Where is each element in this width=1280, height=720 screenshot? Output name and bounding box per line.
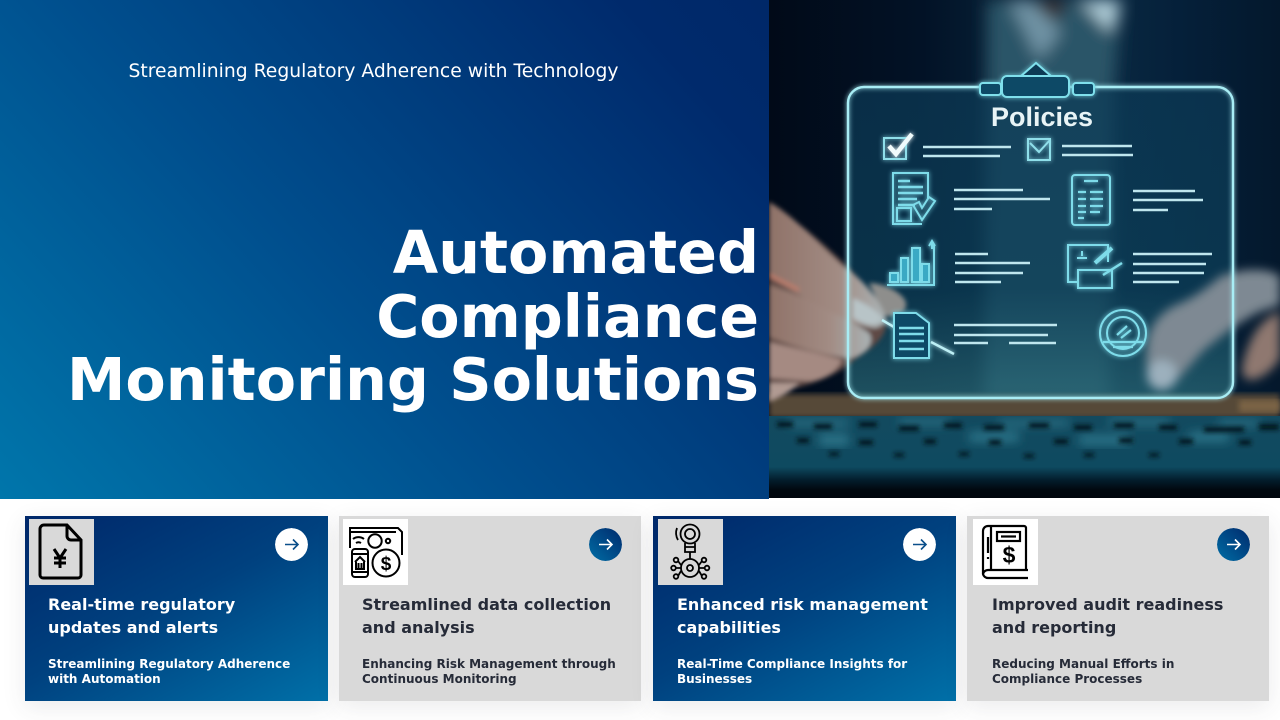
card description: Streamlining Regulatory Adherence bbox=[48, 657, 290, 671]
panel: card 2 data collection bbox=[339, 516, 641, 701]
card description bbox=[992, 657, 1174, 686]
panel: card 4 audit readiness bbox=[967, 516, 1269, 701]
card heading bbox=[677, 595, 928, 637]
card heading: and reporting bbox=[992, 618, 1116, 637]
left hand bbox=[769, 202, 906, 402]
blurred keyboard bbox=[769, 416, 1280, 498]
title: Monitoring Solutions bbox=[67, 346, 759, 414]
card heading: Improved audit readiness bbox=[992, 595, 1223, 614]
card heading: Real-time regulatory bbox=[48, 595, 235, 614]
card description: Real-Time Compliance Insights for bbox=[677, 657, 907, 671]
panel: hero gradient banner bbox=[0, 0, 769, 499]
icon: money and phone bbox=[343, 519, 408, 585]
heading: Policies: Policies bbox=[991, 102, 1093, 132]
card heading: Enhanced risk management bbox=[677, 595, 928, 614]
icon: arrow button bbox=[275, 528, 308, 561]
card description bbox=[362, 657, 616, 686]
clipboard panel fill bbox=[848, 87, 1233, 398]
policies clipboard frame bbox=[848, 63, 1233, 398]
icon: ledger book with dollar bbox=[973, 519, 1038, 585]
document and chart icons bbox=[882, 173, 1146, 358]
card description bbox=[48, 657, 290, 686]
title bbox=[67, 219, 759, 414]
card description: Businesses bbox=[677, 672, 752, 686]
card heading bbox=[48, 595, 235, 637]
panel: card 3 risk management bbox=[653, 516, 956, 701]
card description: Continuous Monitoring bbox=[362, 672, 517, 686]
card heading bbox=[362, 595, 611, 637]
card description: Enhancing Risk Management through bbox=[362, 657, 616, 671]
title: Compliance bbox=[376, 282, 759, 350]
card heading: updates and alerts bbox=[48, 618, 218, 637]
icon: arrow button bbox=[903, 528, 936, 561]
desk strip bbox=[769, 394, 1280, 418]
icon: ledger book with dollar: $ bbox=[1003, 542, 1016, 568]
right hand bbox=[1147, 270, 1280, 390]
text lines bbox=[923, 146, 1212, 343]
card description: with Automation bbox=[48, 672, 161, 686]
icon: money and phone: $ bbox=[381, 554, 392, 575]
card heading: capabilities bbox=[677, 618, 781, 637]
checkbox row bbox=[884, 134, 1050, 160]
icon: arrow button bbox=[589, 528, 622, 561]
card heading: and analysis bbox=[362, 618, 475, 637]
blurred person shirt bbox=[984, 0, 1121, 400]
card description: Compliance Processes bbox=[992, 672, 1142, 686]
icon: lightbulb gear network bbox=[658, 519, 723, 585]
card heading bbox=[992, 595, 1223, 637]
icon: arrow button bbox=[1217, 528, 1250, 561]
card description bbox=[677, 657, 908, 686]
title: Automated bbox=[393, 219, 759, 287]
card description: Reducing Manual Efforts in bbox=[992, 657, 1174, 671]
subtitle: Streamlining Regulatory Adherence with Technology bbox=[128, 61, 618, 82]
clipboard clip bbox=[980, 63, 1094, 97]
photo: hand and glowing policies clipboard bbox=[769, 0, 1280, 498]
panel: card 1 real-time updates bbox=[25, 516, 328, 701]
icon: yen document bbox=[29, 519, 94, 585]
card heading: Streamlined data collection bbox=[362, 595, 611, 614]
